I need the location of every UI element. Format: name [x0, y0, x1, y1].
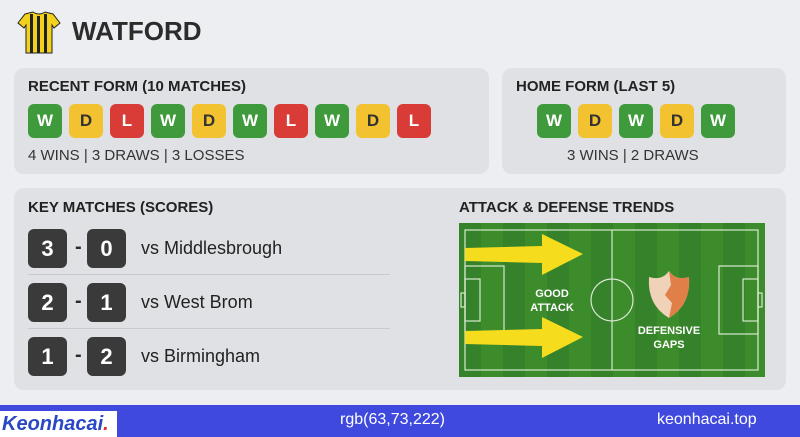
match 3: 2 [100, 344, 113, 369]
heading: attack & defense: ATTACK & DEFENSE TRENDS [459, 199, 674, 216]
footer center text: rgb(63,73,222) [340, 411, 445, 428]
heading: home form: HOME FORM (LAST 5) [516, 78, 675, 95]
panel: key matches and trends [14, 188, 786, 390]
match 1: 0 [100, 236, 113, 261]
form boxes [28, 104, 431, 138]
heading: key matches: KEY MATCHES (SCORES) [28, 199, 213, 216]
form boxes: W [242, 111, 258, 130]
home form boxes: W [546, 111, 562, 130]
form boxes: L [286, 111, 296, 130]
title: WATFORD [72, 16, 202, 46]
match 1: vs Middlesbrough [141, 238, 282, 258]
home form boxes [537, 104, 735, 138]
form boxes: L [409, 111, 419, 130]
icon: broken shield [649, 271, 689, 318]
match 2: - [75, 290, 82, 312]
match 2 [28, 283, 253, 322]
match 3: 1 [41, 344, 54, 369]
match 1 [28, 229, 282, 268]
chart: pitch: GAPS [653, 339, 685, 351]
panel: home form [502, 68, 786, 174]
form boxes: D [203, 111, 215, 130]
label: defensive gaps: DEFENSIVE [638, 325, 700, 337]
home form boxes: D [671, 111, 683, 130]
footer [0, 405, 800, 437]
form summary: 4 WINS | 3 DRAWS | 3 LOSSES [28, 147, 244, 164]
footer url: keonhacai.top [657, 411, 757, 428]
match 3: vs Birmingham [141, 346, 260, 366]
match 1: - [75, 236, 82, 258]
match 3 [28, 337, 260, 376]
form boxes: W [160, 111, 176, 130]
match 3: - [75, 344, 82, 366]
match 1: 3 [41, 236, 54, 261]
form boxes: W [37, 111, 53, 130]
form boxes: D [80, 111, 92, 130]
home summary: 3 WINS | 2 DRAWS [567, 147, 699, 164]
logo: Keonhacai. [2, 413, 109, 435]
home form boxes: W [710, 111, 726, 130]
label: good attack: GOOD [535, 288, 569, 300]
home form boxes: W [628, 111, 644, 130]
arrows [465, 234, 583, 358]
icon: jersey [17, 12, 61, 54]
heading: recent form: RECENT FORM (10 MATCHES) [28, 78, 246, 95]
match 2: 2 [41, 290, 54, 315]
chart: pitch [459, 223, 765, 377]
match 2: vs West Brom [141, 292, 253, 312]
chart: pitch: ATTACK [530, 302, 574, 314]
form boxes: L [122, 111, 132, 130]
form boxes: D [367, 111, 379, 130]
panel: recent form [14, 68, 489, 174]
form boxes: W [324, 111, 340, 130]
home form boxes: D [589, 111, 601, 130]
match 2: 1 [100, 290, 113, 315]
